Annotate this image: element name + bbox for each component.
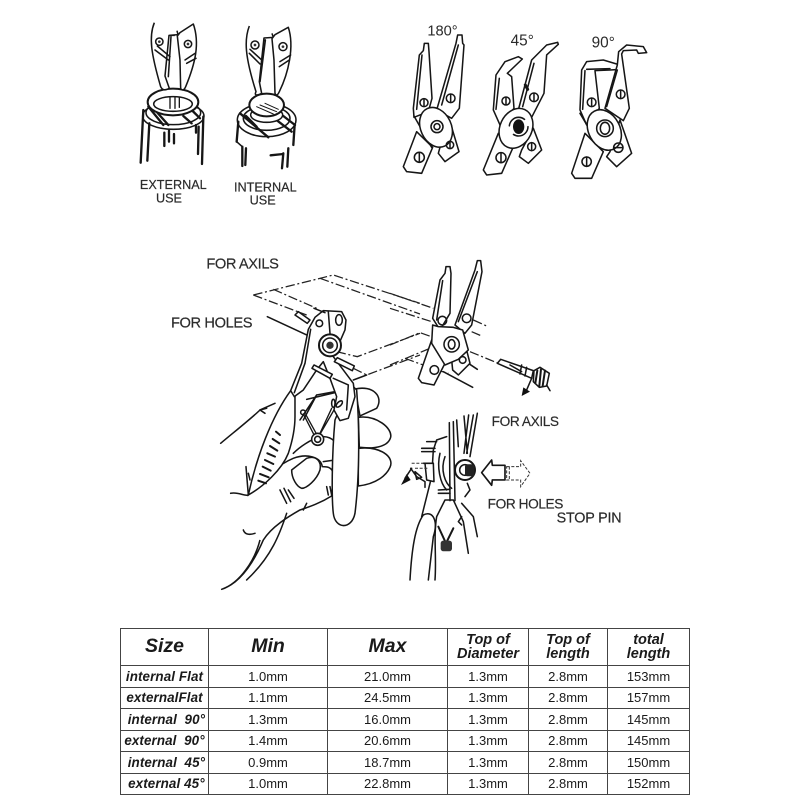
icon: removable pliers head — [418, 261, 482, 385]
label: 45 degrees: 45° — [511, 32, 534, 49]
size table: 2.8mm — [548, 776, 588, 791]
guide lines to second pliers — [253, 275, 420, 380]
size table: 1.1mm — [248, 690, 288, 705]
size table: 1.3mm — [468, 733, 508, 748]
size table: external 45° — [128, 776, 205, 791]
size table: 152mm — [627, 776, 670, 791]
panel: external and internal use — [140, 23, 297, 208]
panel: hand using pliers — [171, 257, 420, 589]
size table: 1.0mm — [248, 669, 288, 684]
size table: 2.8mm — [548, 755, 588, 770]
size table: 1.3mm — [468, 755, 508, 770]
icon: hand — [221, 388, 391, 589]
size table: Min — [251, 635, 285, 657]
label: for axils: FOR AXILS — [206, 257, 279, 273]
size table: length — [546, 646, 590, 662]
icon: 180 degree pliers — [403, 35, 464, 173]
size table: 1.0mm — [248, 776, 288, 791]
size table: 1.3mm — [468, 776, 508, 791]
size table: 21.0mm — [364, 669, 411, 684]
size table: 157mm — [627, 690, 670, 705]
size table: 2.8mm — [548, 733, 588, 748]
size table: 145mm — [627, 712, 670, 727]
panel: jaw angles — [403, 23, 647, 178]
label: 90 degrees: 90° — [592, 34, 615, 51]
size table: 2.8mm — [548, 690, 588, 705]
size table: 1.3mm — [468, 669, 508, 684]
size table: 153mm — [627, 669, 670, 684]
label: for axils: FOR AXILS — [492, 414, 559, 429]
guide lines continued — [390, 293, 500, 387]
label: stop pin: STOP PIN — [557, 511, 621, 527]
size table: internal 45° — [128, 755, 205, 770]
size table: 1.4mm — [248, 733, 288, 748]
size table: 20.6mm — [364, 733, 411, 748]
icon: internal use pliers in bore — [237, 26, 296, 168]
size table: internal 90° — [128, 712, 205, 727]
size table: 1.3mm — [468, 712, 508, 727]
size table: Diameter — [457, 646, 519, 662]
size table: 2.8mm — [548, 669, 588, 684]
label: internal use second line: USE — [250, 194, 276, 208]
size table: 2.8mm — [548, 712, 588, 727]
label: 180 degrees: 180° — [427, 23, 458, 39]
icon: 90 degree pliers — [572, 45, 647, 178]
size table: total — [633, 632, 664, 648]
size table — [120, 628, 690, 795]
size table: length — [627, 646, 670, 662]
label: external use second line: USE — [156, 191, 182, 205]
size table: 145mm — [627, 733, 670, 748]
size table: Top of — [546, 632, 590, 648]
size table: 150mm — [627, 755, 670, 770]
size table: 18.7mm — [364, 755, 411, 770]
label: internal use: INTERNAL — [234, 181, 297, 195]
size table: 1.3mm — [468, 690, 508, 705]
size table: Top of — [466, 632, 510, 648]
panel: second pliers and stop pin — [390, 261, 621, 580]
label: external use: EXTERNAL — [140, 178, 207, 192]
icon: 45 degree pliers — [483, 42, 558, 175]
size table: Size — [145, 635, 184, 657]
size table: 1.3mm — [248, 712, 288, 727]
size table: 24.5mm — [364, 690, 411, 705]
label: for holes: FOR HOLES — [171, 315, 253, 331]
icon: main pliers — [248, 308, 359, 526]
icon: side view detail of pliers — [401, 413, 477, 580]
size table: external 90° — [124, 733, 205, 748]
size table: 16.0mm — [364, 712, 411, 727]
icon: hollow push arrow — [482, 460, 530, 487]
icon: external use pliers on shaft — [141, 23, 204, 164]
icon: adjusting screw with arrow — [497, 359, 550, 396]
size table: externalFlat — [126, 690, 203, 705]
size table: 0.9mm — [248, 755, 288, 770]
size table: 22.8mm — [364, 776, 411, 791]
label: for holes: FOR HOLES — [488, 496, 563, 511]
size table: Max — [369, 635, 406, 657]
size table: internal Flat — [126, 669, 203, 684]
